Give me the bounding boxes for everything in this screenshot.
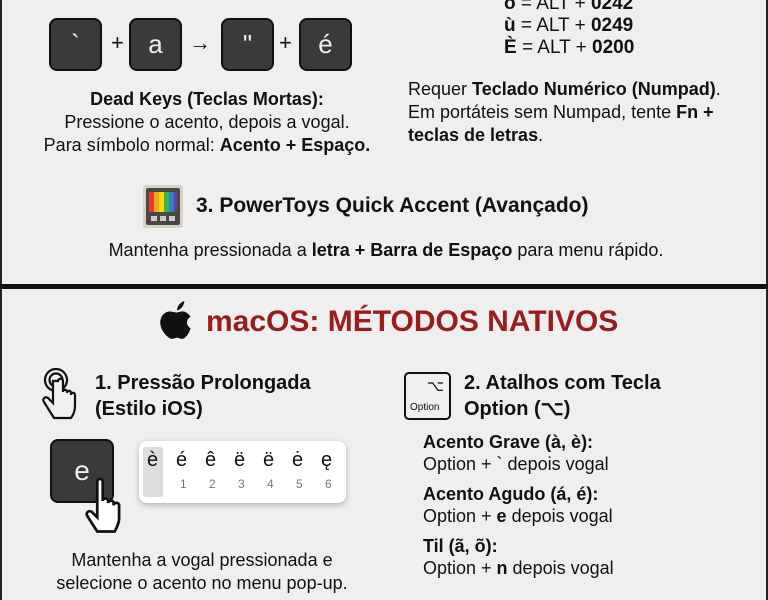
- popup: accent menu: ė: [292, 449, 303, 471]
- key e with hand: [50, 439, 120, 533]
- text: long press description: selecione o acento no menu pop-up.: [56, 573, 348, 593]
- text: powertoys: Mantenha pressionada a letra + Barra de Espaço para menu rápido.: [109, 240, 663, 260]
- heading: option shortcuts: 2. Atalhos com Tecla: [464, 372, 661, 394]
- text: dead keys: Para símbolo normal: Acento + Espaço.: [44, 135, 370, 155]
- dead keys diagram: a: [148, 29, 163, 59]
- icon: apple: [160, 301, 190, 339]
- dead keys diagram: é: [318, 29, 333, 59]
- popup: accent menu: 5: [296, 477, 303, 491]
- popup: accent menu: ë: [234, 449, 245, 471]
- dead keys diagram: +: [279, 30, 292, 55]
- text: numpad: Em portáteis sem Numpad, tente Fn +: [408, 102, 714, 122]
- heading: option shortcuts: Option (⌥): [464, 398, 570, 420]
- ALT codes: [504, 0, 634, 58]
- list: option shortcuts: Acento Agudo (á, é):: [423, 484, 598, 504]
- icon: option key: Option: [410, 402, 439, 413]
- title: macOS: macOS: MÉTODOS NATIVOS: [206, 305, 618, 338]
- list: option shortcuts: Acento Grave (à, è):: [423, 432, 593, 452]
- text: dead keys: Pressione o acento, depois a vogal.: [64, 112, 350, 132]
- key e with hand: e: [74, 455, 90, 486]
- icon: option key: [404, 372, 451, 420]
- list: option shortcuts: Option + n depois vogal: [423, 558, 614, 578]
- text: dead keys: [44, 89, 370, 155]
- heading: long press: 1. Pressão Prolongada: [95, 372, 311, 394]
- popup: accent menu: 6: [325, 477, 332, 491]
- text: long press description: [56, 550, 348, 593]
- list: option shortcuts: [423, 432, 614, 578]
- list: option shortcuts: Til (ã, õ):: [423, 536, 498, 556]
- text: numpad: Requer Teclado Numérico (Numpad).: [408, 79, 721, 99]
- text: dead keys: Dead Keys (Teclas Mortas):: [90, 89, 324, 109]
- popup: accent menu: è: [147, 449, 158, 471]
- text: numpad: teclas de letras.: [408, 125, 543, 145]
- icon: touch hand: [42, 368, 76, 420]
- heading: long press: (Estilo iOS): [95, 398, 203, 420]
- heading: option shortcuts: [464, 372, 661, 420]
- dead keys diagram: `: [71, 29, 80, 59]
- dead keys diagram: +: [111, 30, 124, 55]
- dead keys diagram: →: [189, 30, 211, 55]
- text: long press description: Mantenha a vogal pressionada e: [71, 550, 333, 570]
- popup: accent menu: ë: [263, 449, 274, 471]
- panel: macOS section: [0, 289, 768, 600]
- popup: accent menu: 2: [209, 477, 216, 491]
- heading: powertoys: 3. PowerToys Quick Accent (Avançado): [196, 194, 588, 217]
- heading: long press: [95, 372, 311, 420]
- list: option shortcuts: Option + e depois vogal: [423, 506, 613, 526]
- popup: accent menu: ę: [321, 449, 332, 471]
- list: option shortcuts: Option + ` depois vogal: [423, 454, 609, 474]
- popup: accent menu: 3: [238, 477, 245, 491]
- panel: windows section: [0, 0, 768, 285]
- icon: powertoys: [143, 185, 183, 228]
- ALT codes: È = ALT + 0200: [504, 37, 634, 58]
- popup: accent menu: 4: [267, 477, 274, 491]
- popup: accent menu: 1: [180, 477, 187, 491]
- dead keys diagram: ": [243, 29, 252, 59]
- ALT codes: ù = ALT + 0249: [504, 15, 633, 36]
- popup: accent menu: é: [176, 449, 187, 471]
- text: numpad: [408, 79, 721, 145]
- dead keys diagram: [49, 18, 352, 71]
- popup: accent menu: ê: [205, 449, 216, 471]
- popup: accent menu: [139, 441, 346, 503]
- icon: option key: ⌥: [427, 378, 444, 395]
